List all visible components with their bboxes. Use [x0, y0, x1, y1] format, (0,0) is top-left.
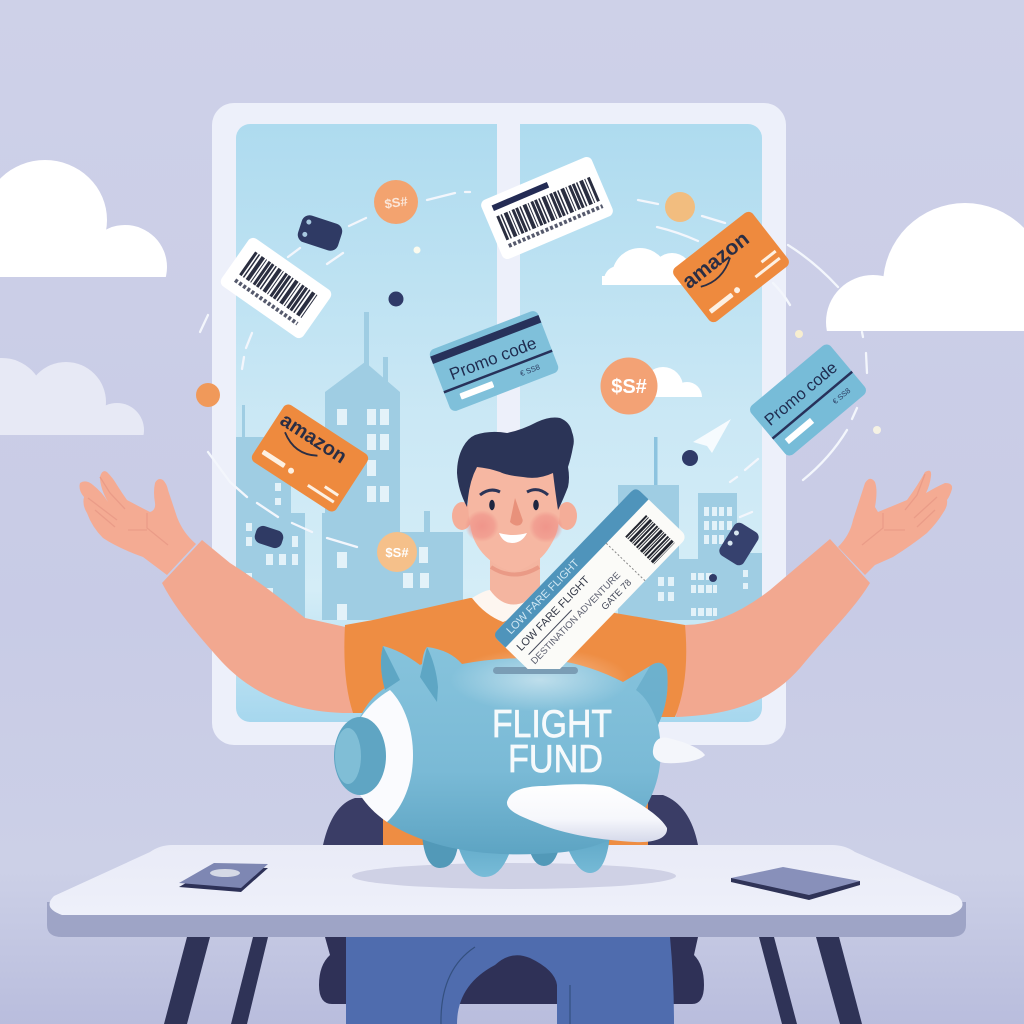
left arm	[162, 540, 354, 713]
boarding pass: LOW FARE FLIGHT	[515, 574, 592, 654]
glow above pig	[450, 648, 630, 712]
coin: centre right: $S#	[611, 376, 647, 398]
person	[80, 418, 952, 845]
left hand	[80, 471, 196, 575]
piggy bank: FUND	[508, 738, 603, 781]
card: barcode top	[479, 155, 615, 261]
coin: top left: $S#	[384, 193, 409, 212]
label: FLIGHT	[492, 703, 612, 746]
card: barcode left	[218, 236, 334, 340]
card: amazon left: amazon	[276, 409, 351, 468]
right arm	[676, 539, 870, 717]
desk top	[50, 845, 962, 915]
card: promo code centre: Promo code	[447, 333, 539, 384]
nose ring	[348, 690, 413, 822]
dot: orange	[196, 383, 220, 407]
dot: navy	[388, 292, 404, 306]
ears	[452, 502, 472, 530]
propeller hub	[334, 717, 386, 795]
small cloud behind coin	[652, 367, 702, 397]
device: right	[731, 867, 860, 900]
piggy bank	[334, 646, 705, 877]
coin: top left	[374, 180, 418, 224]
coin: centre right	[600, 358, 658, 414]
city skyline	[236, 312, 762, 622]
face	[468, 456, 560, 571]
cheeks	[465, 510, 499, 542]
neck	[490, 555, 540, 614]
boarding pass	[495, 489, 684, 669]
cloud: upper left	[0, 160, 167, 277]
chair arms	[323, 795, 698, 845]
smile	[499, 533, 527, 543]
device: left	[179, 863, 268, 892]
pants	[346, 937, 674, 1024]
gadget: lower left	[253, 524, 285, 550]
chair base	[319, 937, 704, 1004]
pig shadow	[352, 863, 676, 889]
boarding pass: GATE 78	[600, 577, 634, 613]
dot: navy small right	[709, 574, 717, 582]
coin: top right plain	[665, 192, 695, 222]
window	[212, 103, 786, 745]
boarding pass: LOW FARE FLIGHT	[504, 557, 582, 637]
hair	[457, 418, 574, 510]
card: amazon left	[250, 402, 370, 514]
card: amazon top right: amazon	[678, 227, 754, 294]
gadget: lower right	[717, 520, 761, 568]
rear ear shade	[636, 663, 668, 725]
right hand	[838, 471, 952, 575]
cloud: right	[826, 203, 1024, 331]
card: amazon top right	[671, 209, 791, 325]
desk legs	[164, 937, 862, 1024]
city windows	[246, 409, 748, 620]
paper plane with dot	[682, 419, 731, 466]
eyes	[489, 500, 495, 510]
card: promo code centre: € SS8	[519, 362, 541, 378]
window glass	[236, 124, 762, 722]
window mullion	[497, 103, 520, 443]
front wing	[507, 784, 667, 842]
dot: cream right	[795, 330, 803, 338]
card: promo code right: Promo code	[761, 359, 841, 430]
card: promo code centre	[428, 309, 560, 413]
coin: lower left	[377, 532, 417, 572]
cloud: lower left	[0, 358, 144, 435]
small cloud behind amazon card	[602, 248, 686, 285]
card: promo code right: € SS8	[831, 386, 852, 406]
card: promo code right	[748, 342, 868, 458]
window frame	[212, 103, 786, 745]
nose	[510, 498, 523, 526]
shirt	[344, 598, 686, 845]
body	[354, 646, 668, 854]
dot: cream far right	[873, 426, 881, 434]
boarding pass: DESTINATION ADVENTURE	[529, 570, 623, 667]
ears inner	[381, 646, 438, 702]
neck shadow	[491, 567, 539, 574]
ticket barcode	[636, 526, 664, 554]
legs	[422, 835, 560, 868]
dot: cream	[414, 246, 420, 254]
motion arcs	[200, 192, 867, 547]
coin: lower left: $S#	[385, 545, 409, 560]
desk	[47, 845, 966, 1024]
gadget: top left	[296, 213, 344, 253]
slot	[493, 667, 578, 674]
collar	[472, 590, 552, 622]
ticket band	[493, 487, 649, 648]
eyebrows	[480, 490, 548, 495]
desk edge	[47, 902, 966, 937]
rear wing	[653, 738, 705, 763]
